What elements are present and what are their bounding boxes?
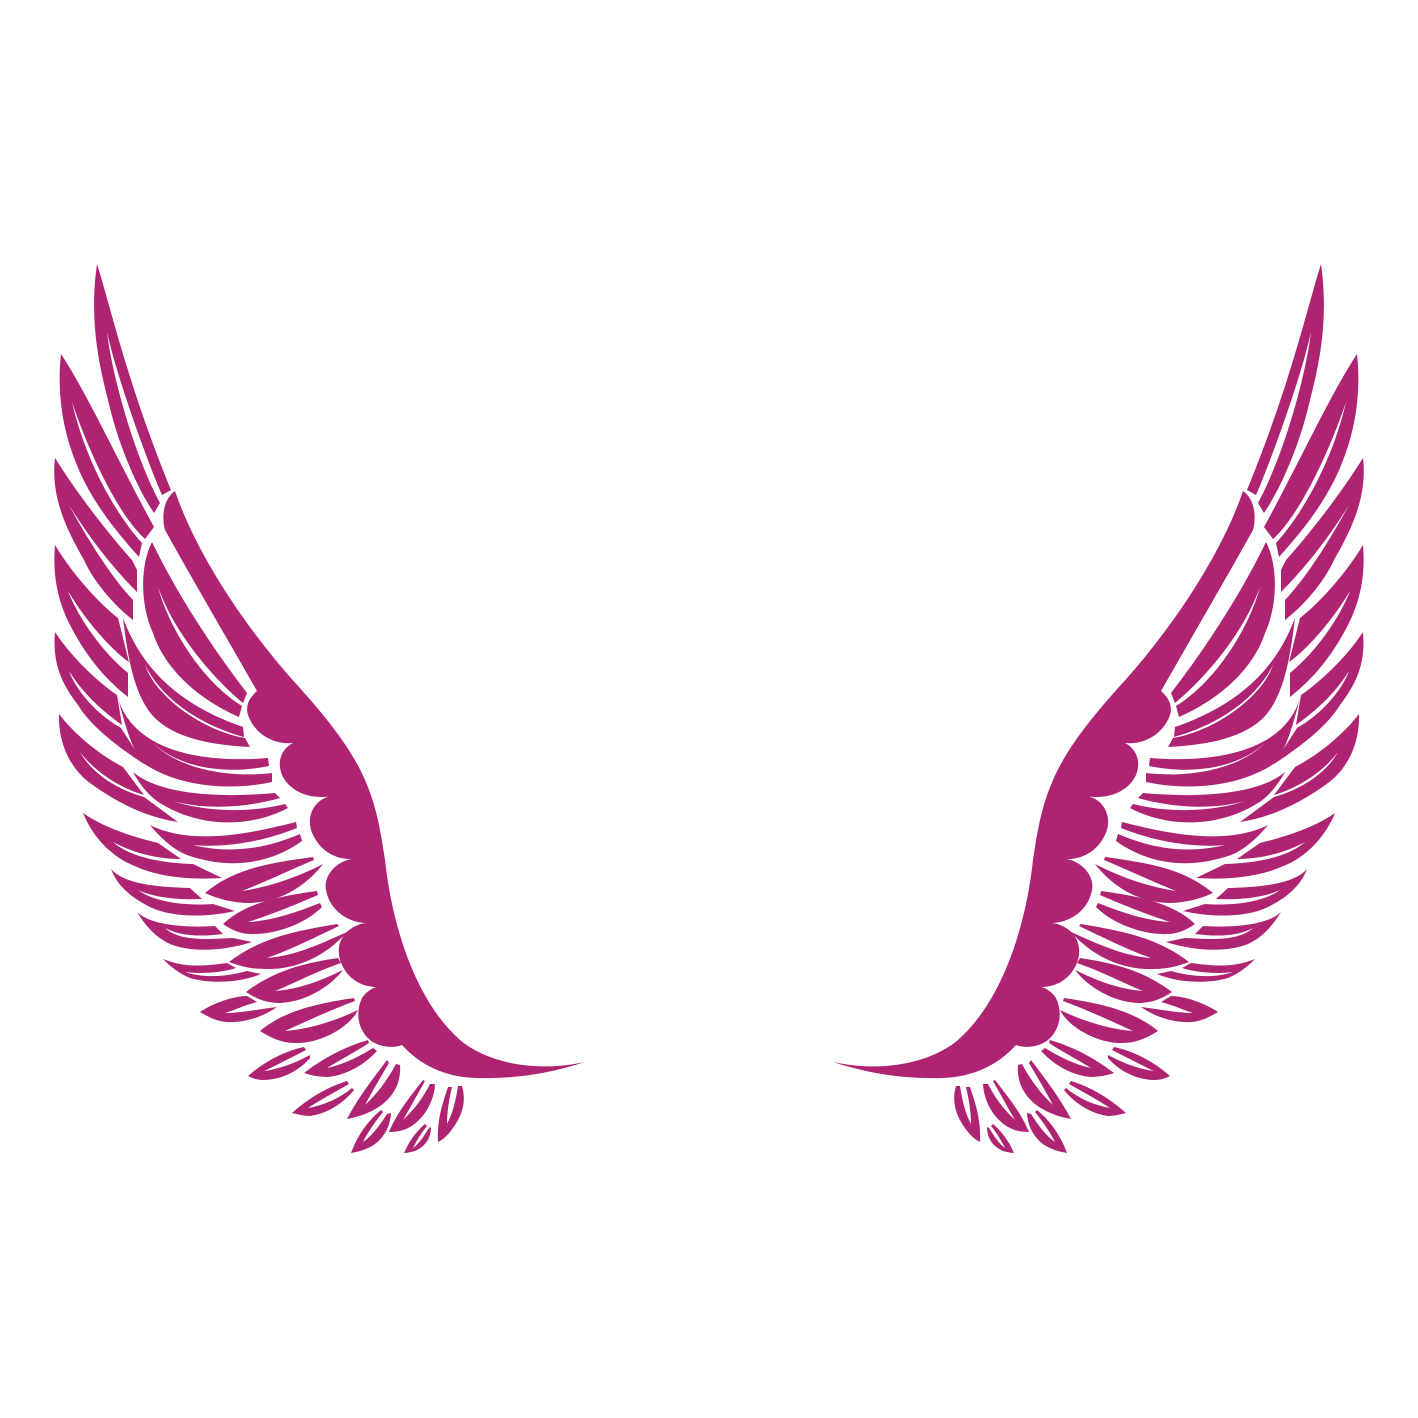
left wing: [54, 264, 585, 1153]
middle leaf feathers: [205, 857, 358, 1043]
lower outer feathers: [83, 813, 277, 1022]
outer primary feathers: [54, 264, 178, 822]
right wing (mirror of left wing): [833, 264, 1364, 1153]
wing arm with scalloped edge: [163, 491, 585, 1078]
inner curved feathers: [118, 542, 302, 863]
bottom small feathers: [248, 1040, 464, 1153]
